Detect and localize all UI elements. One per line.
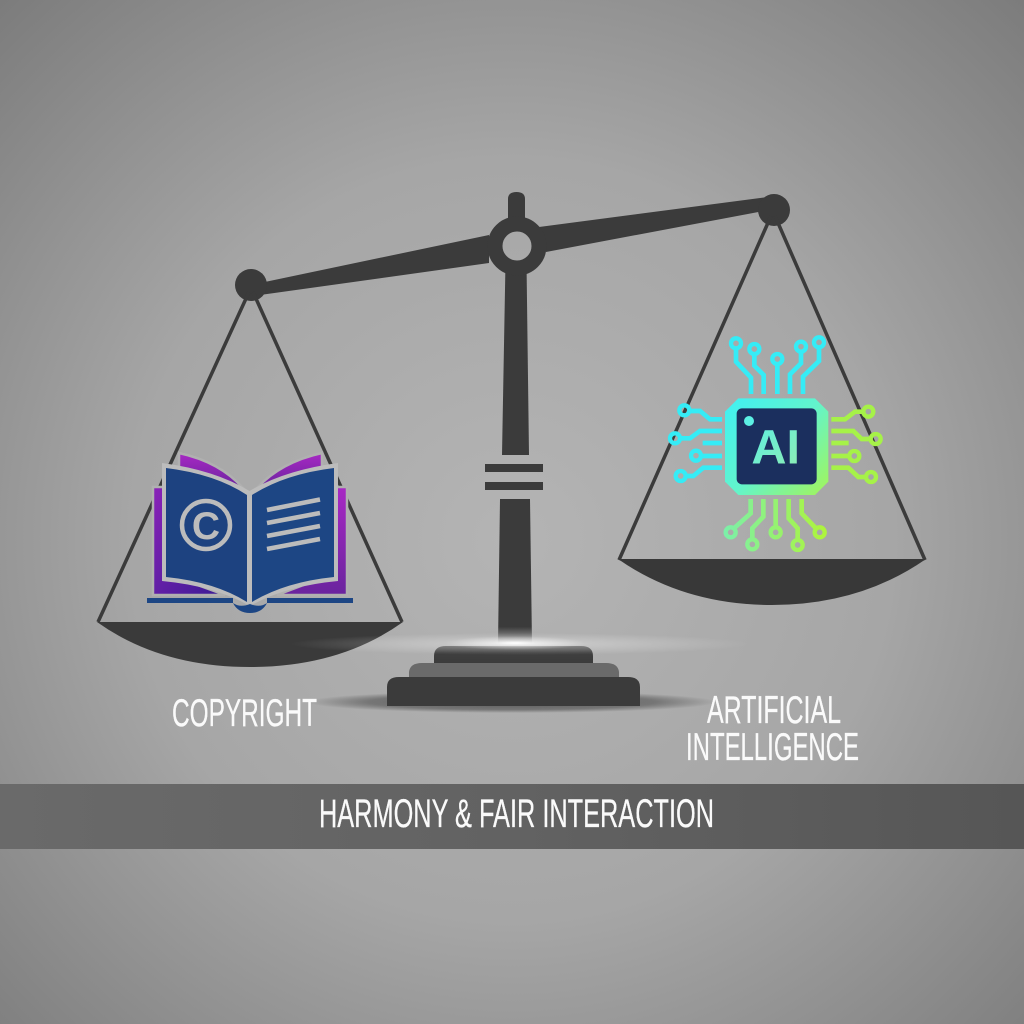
scale column upper (502, 262, 529, 455)
column collar bands (485, 464, 543, 490)
right pivot (758, 194, 790, 226)
left pan (97, 622, 403, 667)
label: artificial intelligence: ARTIFICIAL (707, 689, 841, 732)
circuit traces bottom (726, 499, 825, 550)
chip core (737, 408, 817, 484)
label: artificial intelligence: INTELLIGENCE (686, 726, 859, 769)
base shadow (307, 691, 717, 713)
right page (252, 468, 334, 602)
copyright symbol: C (192, 505, 220, 548)
circuit traces right (831, 407, 881, 482)
banner title: HARMONY & FAIR INTERACTION (319, 792, 714, 836)
pivot top knob (508, 192, 525, 225)
right pan (618, 559, 926, 605)
light glow at column foot (290, 633, 750, 655)
icon: AI chip (670, 337, 881, 550)
page text lines (267, 500, 320, 549)
banner band (0, 784, 1024, 849)
banner (0, 784, 1024, 849)
label: artificial intelligence (686, 689, 859, 769)
book back pages (153, 453, 347, 595)
right hanging cords (619, 216, 925, 560)
book spine bump (233, 603, 267, 613)
balance scale (97, 192, 926, 706)
book page outline (162, 463, 338, 606)
left pivot (235, 269, 267, 301)
chip dot (744, 416, 754, 426)
central pivot ring (495, 224, 539, 268)
copyright symbol (182, 501, 230, 549)
scale column lower (498, 499, 532, 644)
chip body (725, 398, 828, 495)
label: copyright: COPYRIGHT (172, 692, 317, 735)
left page (166, 468, 247, 602)
beam (260, 197, 774, 295)
stand base (387, 646, 640, 706)
left hanging cords (98, 292, 402, 622)
icon: copyright book (147, 453, 353, 613)
circuit traces top and left (670, 337, 824, 481)
book base line (147, 598, 353, 603)
AI label: AI (751, 420, 800, 474)
